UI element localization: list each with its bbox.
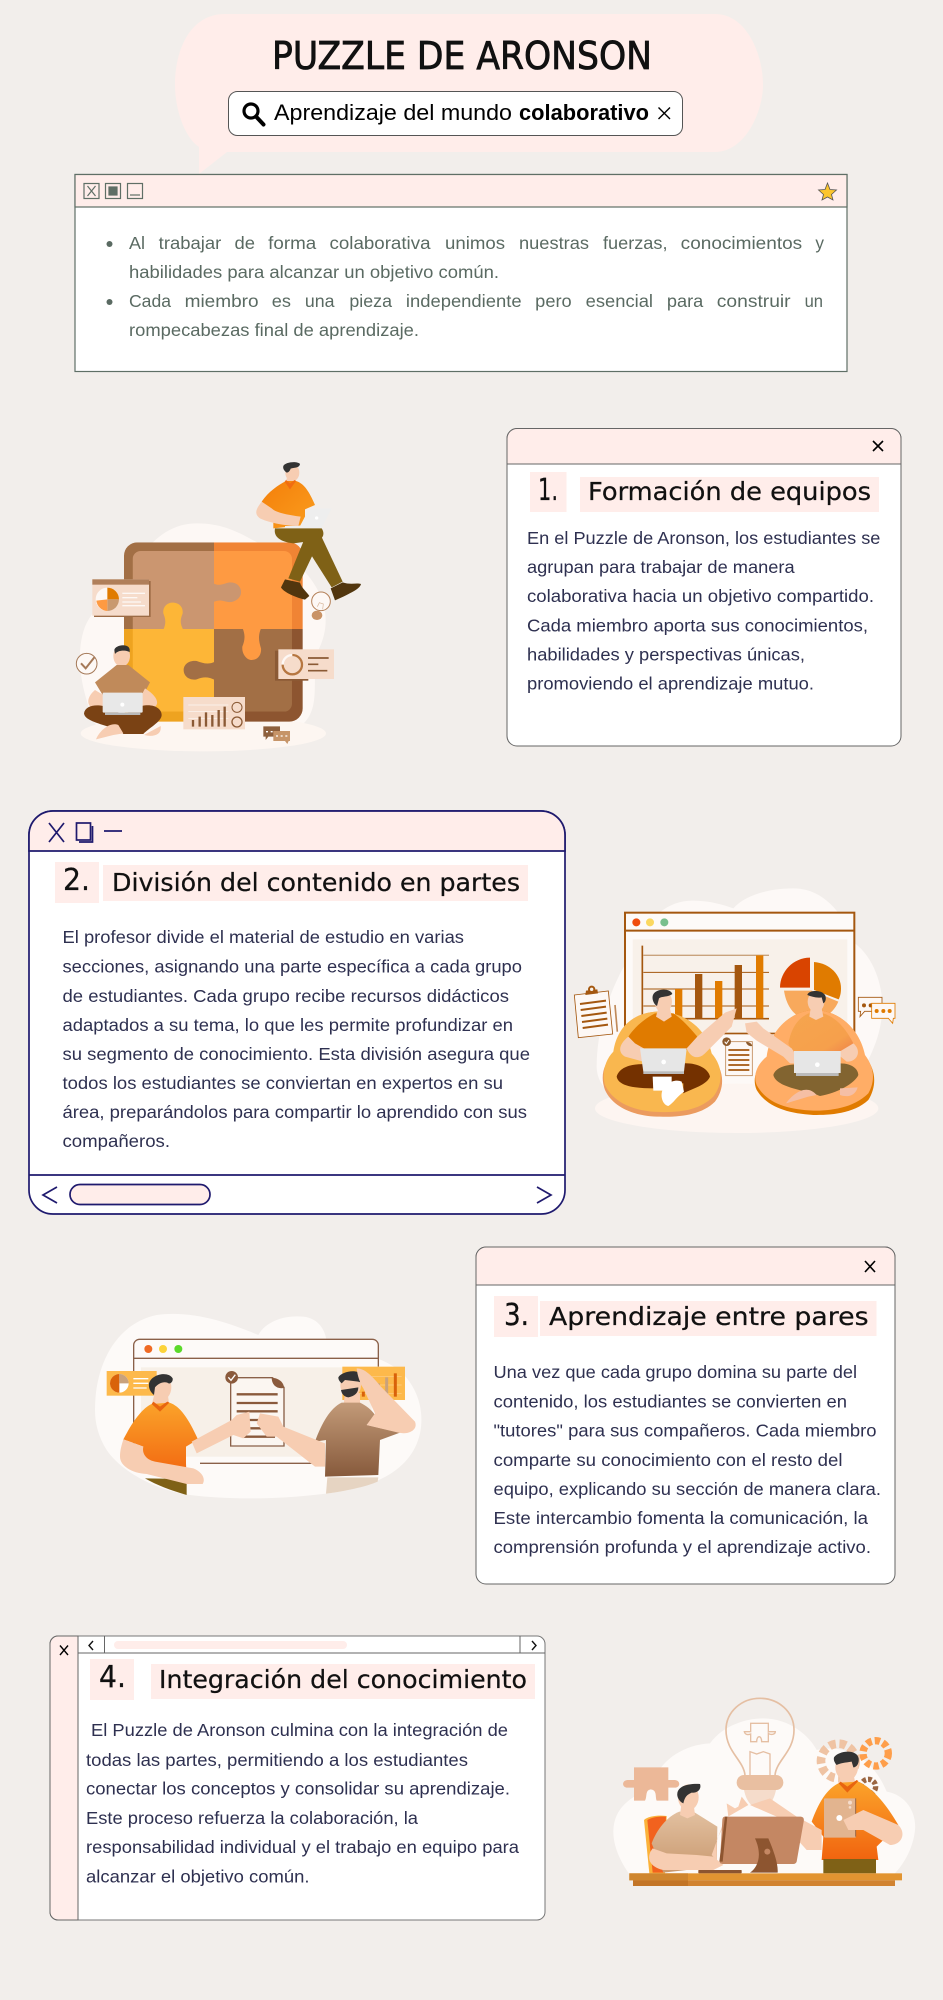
- body text: habilidades y perspectivas únicas,: [527, 644, 805, 664]
- man with laptop sitting: [84, 645, 162, 739]
- body text: El profesor divide el material de estudio en varias: [62, 927, 464, 947]
- panel: intro window: [75, 174, 847, 372]
- intro bullet list: unimos: [445, 233, 505, 253]
- panel: 1 formation of teams: [507, 428, 901, 746]
- search bar: [228, 92, 682, 136]
- body text: secciones, asignando una parte específica a cada grupo: [62, 956, 522, 976]
- body text: agrupan para trabajar de manera: [527, 557, 795, 577]
- title bar: [507, 428, 901, 464]
- man right: [257, 1368, 416, 1494]
- intro bullet list: de: [234, 233, 255, 253]
- body text: todos los estudiantes se conviertan en expertos en su: [62, 1073, 503, 1093]
- icon: close: [60, 1646, 68, 1655]
- step title: Integración del conocimiento: [159, 1665, 527, 1694]
- body text: Cada miembro aporta sus conocimientos,: [527, 616, 868, 636]
- document: [225, 1371, 284, 1446]
- card: pie: [107, 1371, 157, 1396]
- body text: compañeros.: [62, 1131, 170, 1151]
- speech bubble header: [175, 14, 763, 174]
- top scrollbar: [78, 1636, 545, 1653]
- intro bullet list: un: [805, 291, 823, 311]
- panel: 3 peer learning: [476, 1247, 895, 1584]
- body text: promoviendo el aprendizaje mutuo.: [527, 674, 814, 694]
- step title: División del contenido en partes: [112, 868, 520, 897]
- body text: El Puzzle de Aronson culmina con la integración de: [91, 1720, 508, 1740]
- panel: 2 content division: [29, 811, 565, 1214]
- body text: [494, 1362, 881, 1557]
- man with laptop on top: [256, 462, 361, 600]
- man left: [120, 1374, 251, 1495]
- step number: [55, 862, 99, 903]
- intro bullet list: para: [667, 291, 704, 311]
- intro bullet list: independiente: [406, 291, 522, 311]
- icon: magnifier: [244, 104, 264, 124]
- chat bubbles: [858, 997, 895, 1023]
- illustration: integration of knowledge: [613, 1698, 915, 1886]
- intro bullet list: forma: [268, 233, 317, 253]
- body text: conectar los conceptos y consolidar su aprendizaje.: [86, 1778, 510, 1798]
- body text: "tutores" para sus compañeros. Cada miembro: [494, 1420, 876, 1440]
- puzzle: [124, 542, 304, 722]
- step number: 1.: [538, 473, 558, 508]
- intro bullet list: pero: [535, 291, 572, 311]
- intro bullet list: colaborativa: [330, 233, 431, 253]
- intro bullet list: construir: [717, 291, 791, 311]
- icon: window controls: [84, 184, 142, 198]
- icon: check: [76, 653, 97, 674]
- person with tablet: [750, 1752, 902, 1873]
- intro bullet list: trabajar: [159, 233, 222, 253]
- search text bold: colaborativo: [519, 100, 649, 125]
- light bulb: [726, 1698, 794, 1808]
- icon: window controls: [49, 823, 122, 842]
- icon: light bulb: [312, 592, 330, 620]
- intro bullet list: fuerzas,: [603, 233, 668, 253]
- body text: su segmento de conocimiento. Esta división asegura que: [62, 1044, 530, 1064]
- intro bullet list: Cada: [129, 291, 171, 311]
- step number: 4.: [99, 1660, 126, 1695]
- puzzle piece: [623, 1767, 679, 1801]
- intro window title bar: [75, 174, 847, 207]
- illustration: puzzle team: [76, 462, 361, 751]
- body text: Este intercambio fomenta la comunicación, la: [494, 1508, 868, 1528]
- student right on beanbag: [745, 991, 874, 1115]
- browser window: [134, 1339, 378, 1463]
- icon: close: [873, 441, 883, 451]
- computer monitor: [719, 1817, 804, 1873]
- background cloud: [613, 1718, 915, 1875]
- title bar: [476, 1247, 895, 1285]
- icon: chat bubbles: [263, 726, 290, 744]
- title bar: [29, 811, 565, 851]
- body text: comprensión profunda y el aprendizaje activo.: [494, 1537, 871, 1557]
- step title: Formación de equipos: [588, 477, 871, 506]
- scrollbar: [29, 1175, 565, 1204]
- intro bullet list: miembro: [185, 291, 259, 311]
- gears: [821, 1741, 888, 1794]
- intro bullet list: rompecabezas final de aprendizaje.: [129, 320, 419, 340]
- intro bullet list: es: [272, 291, 291, 311]
- body text: contenido, los estudiantes se convierten en: [494, 1392, 847, 1412]
- intro bullet list: esencial: [586, 291, 653, 311]
- intro bullet list: conocimientos: [681, 233, 803, 253]
- intro bullet list: nuestras: [519, 233, 589, 253]
- intro bullet list: una: [305, 291, 335, 311]
- icon: star: [818, 183, 836, 200]
- title: PUZZLE DE ARONSON: [272, 34, 652, 78]
- browser window with charts: [625, 913, 854, 1033]
- intro bullet list: habilidades para alcanzar un objetivo común.: [129, 262, 499, 282]
- body text: de estudiantes. Cada grupo recibe recursos didácticos: [62, 986, 509, 1006]
- body text: comparte su conocimiento con el resto del: [494, 1450, 842, 1470]
- icon: close: [658, 108, 670, 119]
- card: donut chart: [275, 649, 334, 681]
- step number: 3.: [504, 1298, 529, 1333]
- left bar: [50, 1636, 78, 1920]
- step number: [530, 472, 566, 512]
- illustration: two students with charts: [574, 888, 895, 1133]
- ground: [595, 1084, 878, 1133]
- body text: Este proceso refuerza la colaboración, la: [86, 1808, 418, 1828]
- panel: 4 knowledge integration: [50, 1636, 545, 1920]
- illustration: peer learning: [95, 1314, 421, 1498]
- intro bullet list: pieza: [349, 291, 392, 311]
- background blob: [80, 523, 326, 727]
- body text: Una vez que cada grupo domina su parte del: [494, 1362, 857, 1382]
- body text: área, preparándolos para compartir lo aprendido con sus: [62, 1102, 527, 1122]
- body text: En el Puzzle de Aronson, los estudiantes se: [527, 528, 880, 548]
- person at computer: [644, 1784, 748, 1873]
- body text: colaborativa hacia un objetivo compartido.: [527, 586, 874, 606]
- student left on beanbag: [603, 990, 737, 1117]
- icon: close: [865, 1261, 875, 1272]
- body text: [62, 927, 530, 1151]
- intro bullet list: y: [815, 233, 824, 253]
- background blob: [95, 1314, 421, 1498]
- step number: [494, 1296, 538, 1337]
- card: bars: [342, 1367, 405, 1400]
- step title: Aprendizaje entre pares: [549, 1302, 868, 1331]
- body text: alcanzar el objetivo común.: [86, 1866, 310, 1886]
- intro bullet list: [106, 233, 824, 340]
- body text: equipo, explicando su sección de manera clara.: [494, 1479, 881, 1499]
- document: [722, 1037, 752, 1076]
- search text: Aprendizaje del mundo: [274, 100, 512, 125]
- desk: [629, 1870, 902, 1886]
- clipboard: [574, 986, 617, 1038]
- intro bullet list: Al: [129, 233, 145, 253]
- body text: [86, 1720, 519, 1886]
- body text: adaptados a su tema, lo que les permite profundizar en: [62, 1015, 513, 1035]
- step number: 2.: [63, 863, 90, 898]
- background blob: [597, 888, 882, 1093]
- ground: [81, 715, 326, 751]
- card: bar chart: [183, 697, 245, 729]
- body text: responsabilidad individual y el trabajo en equipo para: [86, 1837, 519, 1857]
- card: pie chart: [92, 579, 151, 617]
- body text: [527, 528, 880, 694]
- body text: todas las partes, permitiendo a los estudiantes: [86, 1750, 468, 1770]
- step number: [90, 1659, 134, 1700]
